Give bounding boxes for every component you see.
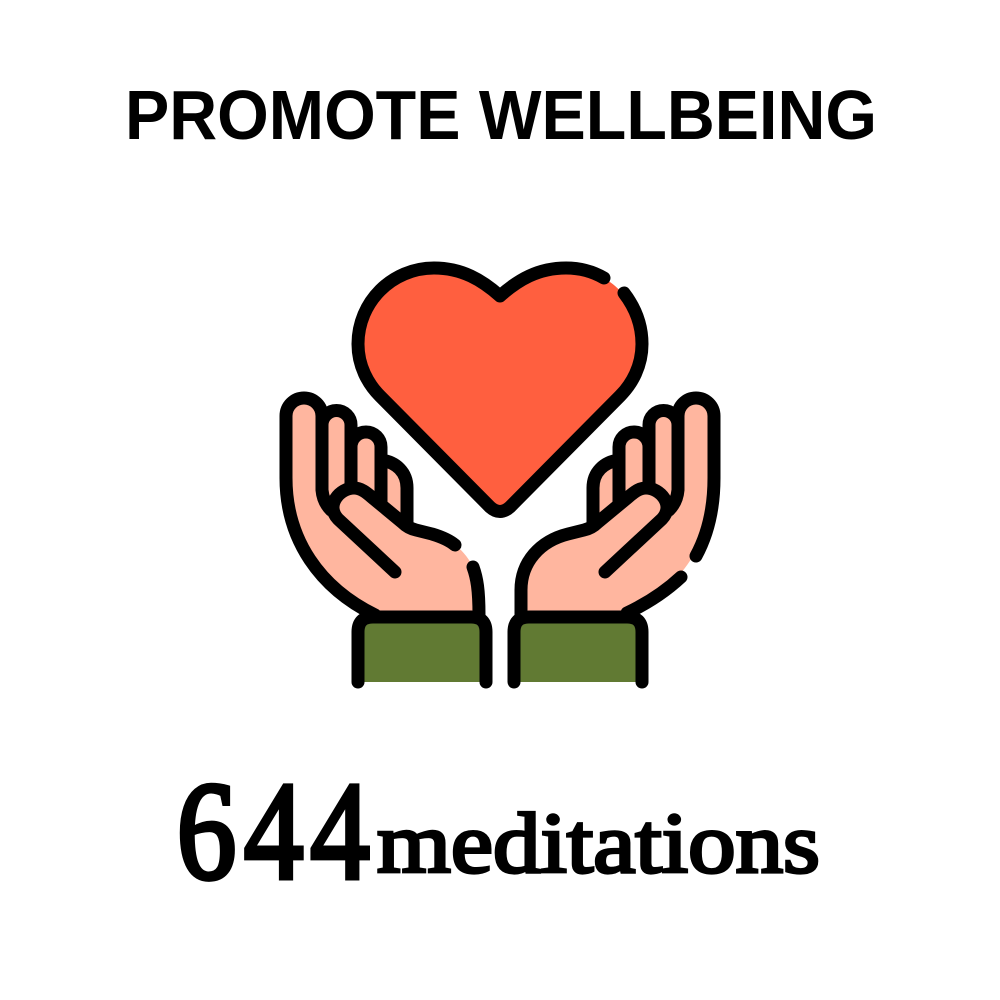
icon: heart — [358, 268, 642, 512]
statistic: 644 meditations — [177, 754, 820, 909]
icon: right sleeve — [514, 617, 642, 682]
icon: left hand — [286, 398, 479, 617]
number: 644 — [177, 754, 370, 909]
icon: left sleeve — [358, 617, 486, 682]
icon: heart held by two hands — [286, 268, 714, 682]
title: PROMOTE WELLBEING — [125, 76, 877, 154]
icon: right hand — [521, 398, 714, 617]
unit label: meditations — [377, 795, 820, 891]
